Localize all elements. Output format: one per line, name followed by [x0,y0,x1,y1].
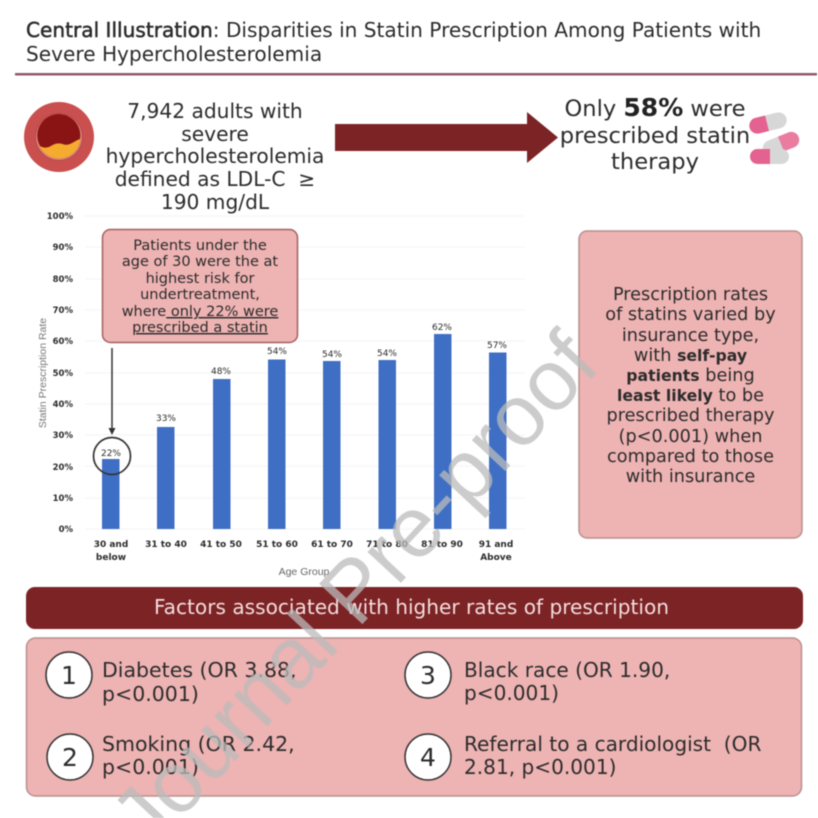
x axis labels: 51 to 60 [256,540,298,550]
factor 2: p<0.001) [102,755,199,779]
x axis labels: 61 to 70 [311,540,353,550]
x axis labels: 41 to 50 [200,540,242,550]
x axis labels: 81 to 90 [421,540,463,550]
factor 4: 2.81, p<0.001) [464,755,616,779]
bar value labels: 22% [101,449,121,459]
y axis labels: 20% [53,463,73,473]
y axis labels: 100% [47,212,73,222]
factor 4: Referral to a cardiologist (OR [464,732,761,756]
factor 4 [405,732,761,780]
y axis labels: 80% [53,275,73,285]
panel: insurance type: patients being [626,366,755,386]
bar chart: prescription rate by age group [37,212,525,578]
bars [102,334,506,529]
bar value labels [101,323,507,459]
y axis labels: 50% [53,369,73,379]
population text: defined as LDL-C ≥ [115,167,315,191]
arrow [335,112,558,163]
factor 4: 4 [420,743,436,772]
title: Severe Hypercholesterolemia [26,42,322,66]
population text: severe [181,122,249,146]
population text: 7,942 adults with [127,99,303,123]
title [26,18,761,66]
panel: insurance type: Prescription rates [613,285,768,305]
panel: insurance type: insurance type, [622,326,759,346]
title: Central Illustration: Disparities in Statin Prescription Among Patients with [26,18,761,42]
bar value labels: 54% [377,349,397,359]
panel: insurance type: prescribed therapy [607,406,774,426]
result text [560,93,750,175]
panel: insurance type: (p<0.001) when [619,427,762,447]
y axis labels: 0% [59,525,73,535]
result text: prescribed statin [560,123,750,149]
population text: hypercholesterolemia [106,144,324,168]
y axis labels: 60% [53,337,73,347]
y axis labels: 90% [53,243,73,253]
panel: insurance type: compared to those [607,447,774,467]
banner: factors heading [26,587,803,629]
icon: artery with plaque [24,102,94,172]
panel: insurance type [579,231,802,538]
bar value labels: 62% [432,323,452,333]
factor 2 [47,732,295,780]
x axis labels: 91 and [479,540,513,550]
factor 2: 2 [62,743,78,772]
panel: insurance type: least likely to be [617,386,764,406]
bar value labels: 33% [156,414,176,424]
bar value labels: 57% [487,341,507,351]
banner: factors heading: Factors associated with higher rates of prescription [154,595,669,619]
y axis labels: 70% [53,306,73,316]
factor 1: p<0.001) [102,682,199,706]
factor 3: p<0.001) [464,681,559,705]
callout: under 30: highest risk for [146,271,254,287]
factor 2: Smoking (OR 2.42, [102,732,295,756]
x axis title: Age Group [279,566,330,578]
bar value labels: 48% [211,367,231,377]
panel: insurance type: with insurance [626,467,755,487]
factor 1 [46,652,297,706]
arrow: callout to first bar [108,348,116,435]
callout: under 30: where only 22% were [122,304,278,320]
factor 1: Diabetes (OR 3.88, [102,658,297,682]
result text: therapy [611,149,699,175]
icon: pills [748,111,802,164]
highlight circle around 22% [94,438,130,474]
x axis labels: 71 to 80 [366,540,408,550]
y axis labels: 40% [53,400,73,410]
y axis labels: 10% [53,494,73,504]
bar value labels: 54% [267,347,287,357]
x axis labels: below [96,553,126,563]
x axis labels [94,540,513,563]
panel: insurance type: with self-pay [634,346,747,366]
panel: insurance type: of statins varied by [605,305,776,325]
callout: under 30: age of 30 were the at [122,254,278,270]
callout: under 30: Patients under the [133,238,267,254]
y axis labels [47,212,73,535]
population text: 190 mg/dL [161,190,270,214]
factor 3: 3 [420,661,436,690]
population text [106,99,324,214]
y axis labels: 30% [53,431,73,441]
result text: Only 58% were [564,93,746,122]
factor 3 [405,652,670,705]
factor 3: Black race (OR 1.90, [464,658,670,682]
x axis labels: 31 to 40 [145,540,187,550]
x axis labels: Above [480,553,512,563]
x axis labels: 30 and [94,540,128,550]
factor 1: 1 [61,661,77,690]
callout: under 30: prescribed a statin [132,320,268,336]
callout: under 30 [102,230,298,342]
y axis title: Statin Prescription Rate [37,318,49,428]
panel: factors [26,638,802,796]
callout: under 30: undertreatment, [140,287,260,303]
bar value labels: 54% [322,350,342,360]
